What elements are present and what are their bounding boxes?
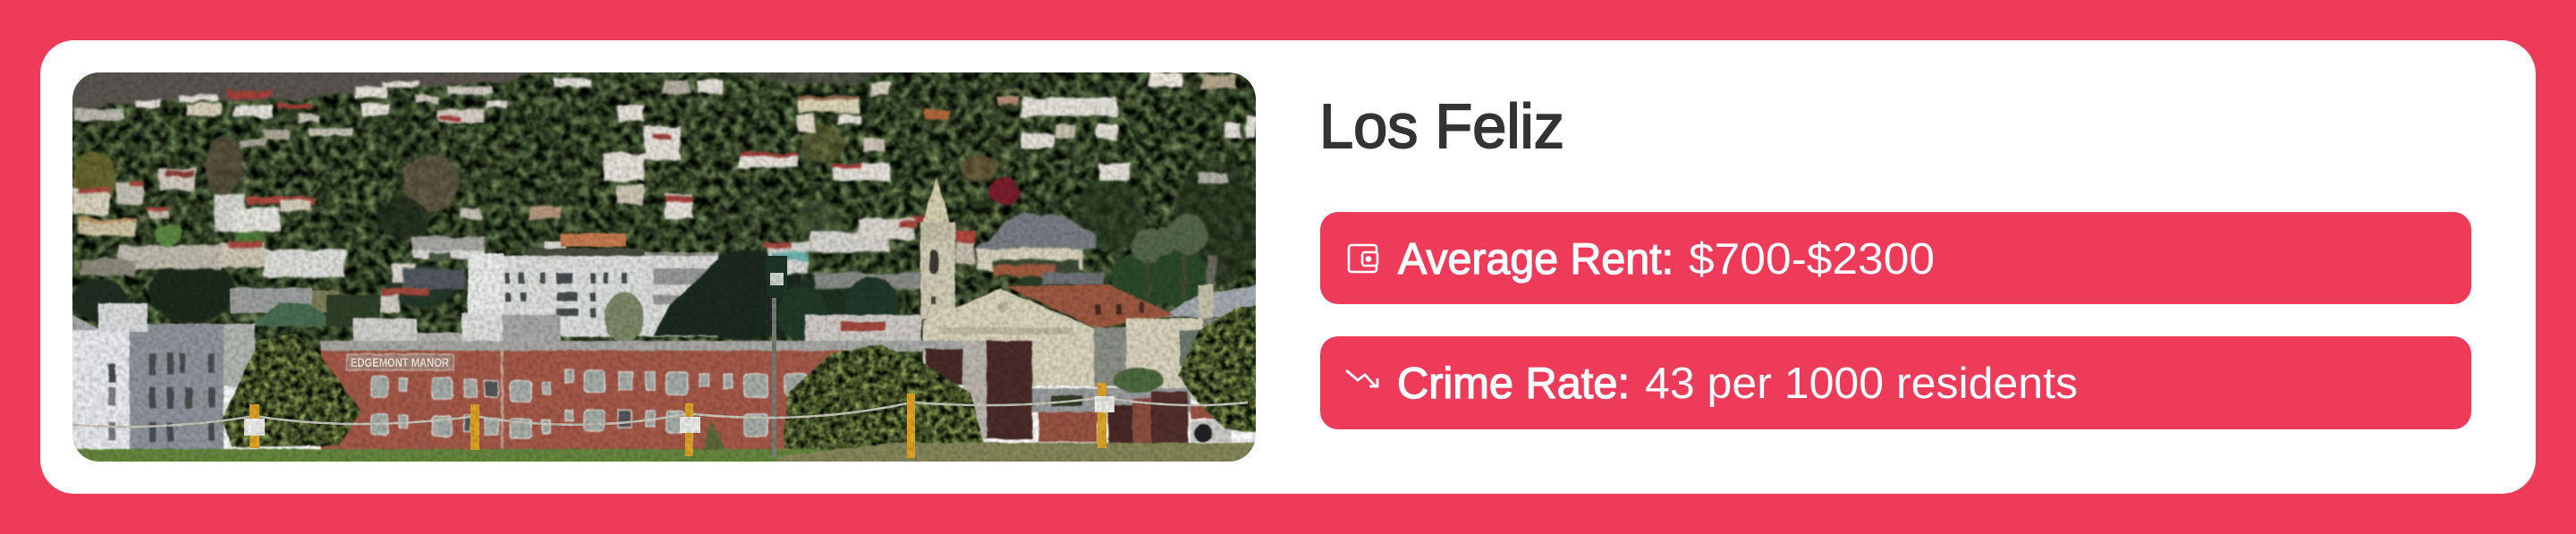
hillside foliage (63, 63, 1266, 385)
photo grain (72, 72, 1256, 462)
stat pill: crime rate (1320, 336, 2471, 429)
white signs on posts (244, 396, 1114, 436)
low roofs and blocks behind brick building (230, 288, 921, 351)
hillside red roofs (228, 90, 927, 222)
street sign and pole (767, 256, 787, 457)
upper hillside (63, 63, 1266, 385)
sign lettering: EDGEMONT MANOR (351, 355, 449, 369)
title: Los Feliz (1319, 91, 1564, 161)
icon: trending down arrow (1346, 370, 1377, 386)
bell tower (920, 177, 955, 318)
palm trees (1131, 215, 1216, 300)
value: rent range: $700-$2300 (1689, 235, 1935, 284)
foreground buildings (63, 177, 1261, 467)
white apartment building (468, 233, 719, 343)
brick building (320, 341, 964, 458)
church with red roof (923, 284, 1261, 401)
icon: wallet (1349, 245, 1377, 272)
label: crime rate: Crime Rate: (1397, 360, 1630, 408)
mid-slope houses (72, 168, 975, 313)
left white and gray apartment buildings (63, 303, 255, 455)
grass (63, 443, 1261, 467)
value: crime rate figure: 43 per 1000 residents (1645, 360, 2078, 408)
gray mansion (977, 215, 1104, 284)
photo: Los Feliz hillside neighbourhood (72, 72, 1256, 462)
lower right brick annex and dark panels (926, 341, 1235, 443)
conifer trees (653, 254, 899, 340)
yellow posts (250, 383, 1106, 458)
hilltop houses (74, 72, 1256, 218)
stat pill: average rent (1320, 212, 2471, 304)
chain line (72, 398, 1248, 427)
left tree (222, 333, 361, 447)
label: average rent: Average Rent: (1398, 235, 1674, 284)
bushes in front of buildings (702, 304, 1261, 456)
gray building and chimney at right (1161, 284, 1261, 320)
